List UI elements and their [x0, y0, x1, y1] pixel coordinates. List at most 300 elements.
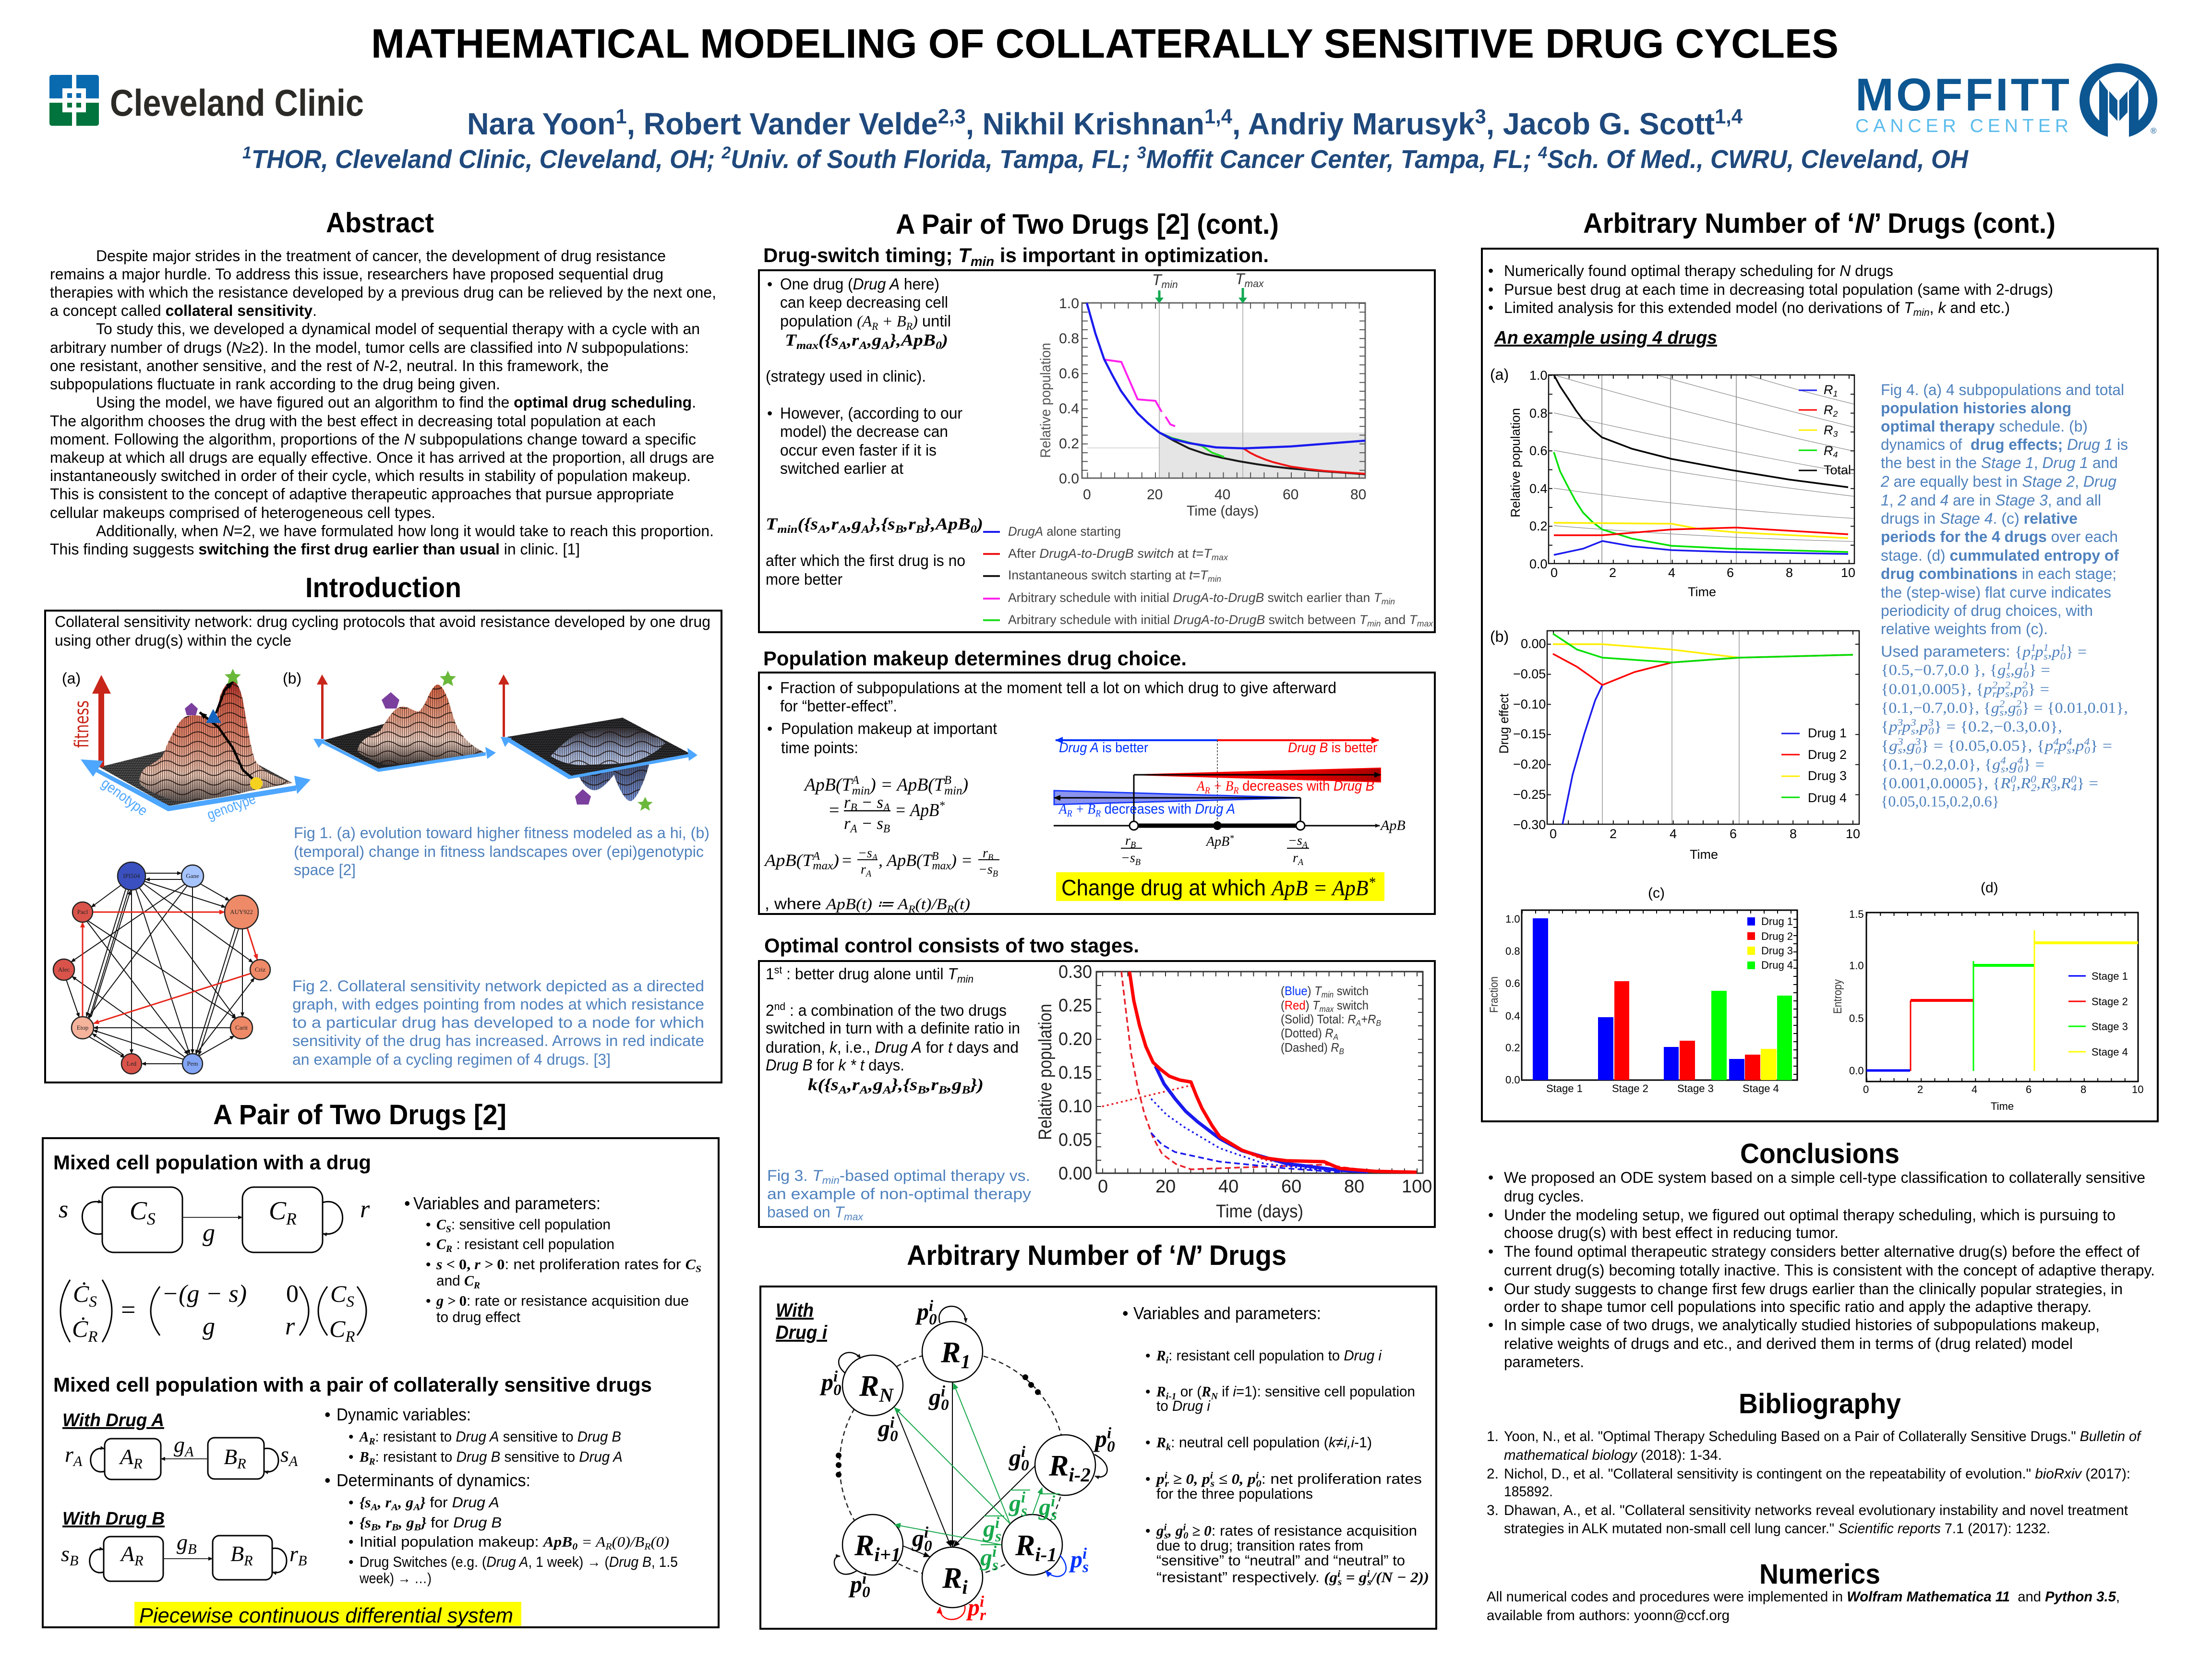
chart a: subpopulation histories: R4 — [1824, 444, 1838, 459]
equations: ApB at Tmin and Tmax: −sA — [858, 846, 878, 862]
list: variables and parameters — [404, 1193, 701, 1325]
chart b: drug effect: Drug 1 — [1808, 726, 1847, 740]
diagram: drug cycle state graph: pi0 — [1093, 1425, 1115, 1455]
legend: drug schedule curves: DrugA alone starting — [1008, 524, 1121, 539]
figure 2: collateral sensitivity network graph: Etop — [77, 1024, 88, 1031]
chart: optimal vs non-optimal therapy: (Dotted) RA — [1281, 1026, 1338, 1042]
chart c: fraction of drugs per stage: 1.0 — [1505, 913, 1520, 925]
figure 2: collateral sensitivity network graph: Alec — [58, 966, 70, 973]
diagram: with drug B: With Drug B — [62, 1509, 165, 1529]
diagram: drug choice number line: rB — [1125, 833, 1136, 850]
list: variables and parameters: CS: sensitive cell population — [436, 1216, 611, 1235]
text: used parameters: {0.001,0.0005}, { R01,R02,R03,R04} = — [1881, 773, 2098, 793]
text: collateral sensitivity network — [55, 613, 710, 649]
subheading: optimal control: Optimal control consists of two stages. — [764, 934, 1139, 957]
equation: matrix ODE: ĊS — [73, 1280, 97, 1310]
equation: matrix ODE: 0 — [286, 1280, 299, 1308]
chart: relative population over time with Tmin and Tmax: Relative population — [1038, 343, 1054, 458]
chart d: cumulated entropy: Stage 4 — [2092, 1046, 2128, 1058]
chart c: fraction of drugs per stage: (c) — [1648, 885, 1665, 901]
list: variables and parameters for N drugs: Ri-1 or (RN if i=1): sensitive cell population — [1156, 1383, 1415, 1402]
chart: optimal vs non-optimal therapy: 0.10 — [1058, 1096, 1092, 1117]
equations: ApB at Tmin and Tmax: = — [829, 800, 839, 820]
caption: figure 2 — [292, 977, 704, 1068]
chart b: drug effect: −0.15 — [1513, 727, 1546, 741]
diagram: drug choice number line: rA — [1293, 851, 1304, 867]
subheading: pair of collaterally sensitive drugs: Mixed cell population with a pair of collaterally sensitive drugs — [53, 1373, 652, 1396]
text: drug-switch timing explanation: occur even faster if it is — [780, 441, 937, 459]
list: variables and parameters: • — [426, 1237, 431, 1252]
chart d: cumulated entropy: 8 — [2080, 1083, 2086, 1095]
diagram: drug cycle state graph: gis — [983, 1515, 1001, 1545]
list: conclusions: • — [1488, 1243, 1493, 1260]
list: conclusions: Our study suggests to change first few drugs earlier than the clinically popular strategies, in — [1504, 1280, 2123, 1298]
text block: abstract: makeup at which all drugs are equally effective. Once it has arrived at the proportion, all drugs are — [50, 449, 714, 466]
text: two stages: switched in turn with a definite ratio in — [766, 1019, 1020, 1037]
chart d: cumulated entropy: (d) — [1981, 880, 1998, 896]
equations: ApB at Tmin and Tmax: = ApB* — [895, 799, 945, 820]
diagram: with drug A — [62, 1410, 298, 1479]
text: drug-switch timing explanation — [766, 275, 983, 588]
list: bibliography: 185892. — [1504, 1484, 1553, 1500]
chart d: cumulated entropy: Time — [1991, 1100, 2014, 1112]
list: bibliography: Yoon, N., et al. "Optimal Therapy Scheduling Based on a Pair of Collaterally Sensitive Drugs." Bulletin of — [1504, 1429, 2142, 1444]
list: numerical findings: Limited analysis for this extended model (no derivations of Tmin, k and etc.) — [1504, 299, 2010, 318]
list: conclusions: • — [1488, 1316, 1493, 1334]
text: drug-switch timing explanation: switched earlier at — [780, 459, 903, 477]
list: variables and parameters for N drugs: • — [1145, 1435, 1151, 1451]
chart a: subpopulation histories: 0.6 — [1529, 444, 1548, 458]
logo: Moffitt Cancer Center: CANCER CENTER — [1855, 116, 2068, 136]
equation: matrix ODE: CS — [330, 1280, 354, 1310]
list: numerical findings: • — [1488, 299, 1493, 316]
chart a: subpopulation histories: 0.4 — [1529, 481, 1548, 496]
equations: ApB at Tmin and Tmax: rB — [983, 846, 993, 862]
text: population makeup explanation: for “better-effect”. — [780, 697, 897, 715]
chart a: subpopulation histories: 10 — [1841, 565, 1855, 580]
text: used parameters — [1881, 642, 2128, 810]
caption: figure 4: stage. (d) cummulated entropy of — [1881, 547, 2119, 564]
chart c: fraction of drugs per stage: Stage 4 — [1743, 1082, 1779, 1094]
caption: figure 4: periodicity of drug choices, with — [1881, 602, 2093, 619]
equations: ApB at Tmin and Tmax: ApB(TAmax) — [764, 850, 839, 872]
label: with drug i — [776, 1300, 828, 1343]
list: variables and parameters for N drugs: • — [1145, 1523, 1151, 1539]
list: dynamic variables and determinants: • — [349, 1554, 354, 1570]
legend: drug schedule curves — [983, 524, 1433, 628]
chart: optimal vs non-optimal therapy: 80 — [1344, 1177, 1364, 1197]
text: drug-switch timing explanation: Tmin({sA,rA,gA},{s B,rB},ApB 0) — [766, 515, 983, 535]
chart d: cumulated entropy: 1.5 — [1849, 908, 1864, 920]
heading: Introduction: Introduction — [305, 572, 461, 603]
list: variables and parameters for N drugs — [1122, 1303, 1429, 1587]
callout: change drug at ApB = ApB*: Change drug at which ApB = ApB* — [1061, 874, 1376, 900]
logo: Moffitt Cancer Center: ® — [2151, 126, 2157, 135]
chart b: drug effect: 6 — [1730, 827, 1737, 841]
chart: optimal vs non-optimal therapy: 0.25 — [1058, 996, 1092, 1016]
chart a: subpopulation histories: 8 — [1786, 565, 1793, 580]
list: dynamic variables and determinants: • — [349, 1534, 354, 1550]
list: conclusions: choose drug(s) with best effect in reducing tumor. — [1504, 1224, 1839, 1241]
chart a: subpopulation histories: 2 — [1609, 565, 1616, 580]
caption: figure 1: space [2] — [294, 861, 356, 878]
list: conclusions: parameters. — [1504, 1353, 1584, 1370]
caption: figure 2: sensitivity of the drug has increased. Arrows in red indicate — [292, 1032, 704, 1049]
text block: abstract: a concept called collateral sensitivity. — [50, 302, 317, 319]
list: dynamic variables and determinants: • — [349, 1449, 354, 1465]
equation: matrix ODE: = — [121, 1295, 135, 1324]
chart: optimal vs non-optimal therapy: (Red) Tmax switch — [1281, 998, 1369, 1014]
diagram: with drug A: sA — [280, 1442, 298, 1469]
list: variables and parameters: CR : resistant cell population — [436, 1236, 614, 1254]
diagram: drug cycle state graph: gi0 — [912, 1524, 932, 1555]
list: bibliography — [1487, 1429, 2142, 1537]
chart: optimal vs non-optimal therapy: 0.05 — [1058, 1130, 1092, 1150]
text: drug-switch timing explanation: However, (according to our — [780, 404, 962, 422]
diagram: drug choice number line: AR + BR decreases with Drug A — [1058, 801, 1235, 819]
figure 2: collateral sensitivity network graph: AUY922 — [230, 908, 253, 915]
text: two stages: 2nd : a combination of the two drugs — [766, 1000, 1007, 1019]
chart c: fraction of drugs per stage: Stage 1 — [1546, 1082, 1583, 1094]
diagram: with drug A: BR — [224, 1444, 246, 1472]
panel: arbitrary number of drugs — [760, 1286, 1436, 1629]
diagram: drug cycle state graph: gis — [1038, 1493, 1057, 1524]
text block: abstract: arbitrary number of drugs (N≥2). In the model, tumor cells are classified into N subpopulations: — [50, 339, 689, 356]
diagram: drug cycle state graph: Ri-2 — [1048, 1450, 1091, 1486]
diagram: two-compartment model — [59, 1187, 370, 1252]
diagram: drug choice number line — [1054, 740, 1406, 867]
diagram: with drug B: BR — [230, 1541, 253, 1569]
caption: figure 3: Fig 3. Tmin-based optimal therapy vs. — [767, 1167, 1030, 1186]
equations: ApB at Tmin and Tmax: ApB(TAmin) = ApB(TBmin) — [803, 774, 968, 797]
chart a: subpopulation histories: 0.8 — [1529, 406, 1548, 421]
text block: abstract — [50, 247, 716, 558]
figure 2: collateral sensitivity network graph: Carit — [235, 1024, 248, 1031]
list: variables and parameters for N drugs: pir ≥ 0, p is ≤ 0, p i0: net proliferation rates — [1155, 1470, 1422, 1489]
chart b: drug effect: (b) — [1490, 628, 1509, 645]
text: collateral sensitivity network: using other drug(s) within the cycle — [55, 632, 291, 649]
equation: matrix ODE: CR — [329, 1315, 355, 1346]
equations: ApB at Tmin and Tmax: rB − sA — [844, 793, 890, 814]
diagram: with drug B: gB — [177, 1530, 197, 1557]
list: conclusions: • — [1488, 1280, 1493, 1298]
chart b: drug effect: −0.30 — [1513, 817, 1546, 832]
chart a: subpopulation histories: 0.0 — [1529, 557, 1548, 571]
chart a: subpopulation histories: 0.2 — [1529, 519, 1548, 533]
chart c: fraction of drugs per stage: 0.0 — [1505, 1074, 1520, 1086]
equations: ApB at Tmin and Tmax: = — [842, 851, 852, 870]
chart b: drug effect: −0.25 — [1513, 787, 1546, 802]
subheading: an example using 4 drugs: An example using 4 drugs — [1494, 328, 1717, 348]
list: variables and parameters for N drugs: for the three populations — [1156, 1485, 1313, 1502]
list: variables and parameters for N drugs: “resistant” respectively. (gis = gis/(N − 2)) — [1156, 1569, 1429, 1587]
chart d: cumulated entropy: 1.0 — [1849, 960, 1864, 972]
list: dynamic variables and determinants: Initial population makeup: ApB0 = AR(0)/BR(0) — [360, 1533, 669, 1552]
text block: numerics: All numerical codes and procedures were implemented in Wolfram Mathematica 11 and Python 3.5, — [1487, 1589, 2120, 1605]
list: variables and parameters: s < 0, r > 0: net proliferation rates for CS — [436, 1256, 701, 1274]
text: two stages: Drug B for k * t days. — [766, 1056, 904, 1074]
chart c: fraction of drugs per stage: Drug 1 — [1761, 915, 1793, 927]
chart a: subpopulation histories: R3 — [1824, 423, 1838, 439]
chart a: subpopulation histories: Total — [1824, 463, 1851, 477]
chart: optimal vs non-optimal therapy: 0.20 — [1058, 1029, 1092, 1049]
legend: drug schedule curves: Arbitrary schedule with initial DrugA-to-DrugB switch earlier than Tmin — [1008, 590, 1395, 606]
chart b: drug effect: 2 — [1610, 827, 1617, 841]
chart: optimal vs non-optimal therapy: 0.15 — [1058, 1063, 1092, 1083]
diagram: drug cycle state graph: pi0 — [848, 1570, 870, 1601]
list: conclusions: drug cycles. — [1504, 1188, 1584, 1205]
list: variables and parameters for N drugs: Rk: neutral cell population (k≠i,i-1) — [1156, 1434, 1372, 1453]
chart d: cumulated entropy: 0.5 — [1849, 1012, 1864, 1024]
list: variables and parameters: • — [426, 1293, 431, 1309]
list: numerical findings: Pursue best drug at each time in decreasing total population (same with 2-drugs) — [1504, 281, 2053, 298]
text: drug-switch timing explanation: Tmax({sA,rA,gA},ApB 0) — [785, 331, 948, 351]
list: conclusions: In simple case of two drugs, we analytically studied histories of subpopulations makeup, — [1504, 1316, 2100, 1334]
chart: optimal vs non-optimal therapy — [1035, 962, 1432, 1222]
chart: optimal vs non-optimal therapy: (Blue) Tmin switch — [1281, 984, 1369, 999]
diagram: two-compartment model: CS — [130, 1196, 156, 1228]
figure 2: collateral sensitivity network graph: Led — [127, 1060, 137, 1067]
text: drug-switch timing explanation: One drug (Drug A here) — [780, 275, 939, 293]
list: variables and parameters for N drugs: due to drug; transition rates from — [1156, 1537, 1363, 1554]
caption: figure 1: (temporal) change in fitness landscapes over (epi)genotypic — [294, 843, 704, 860]
text block: abstract: remains a major hurdle. To address this issue, researchers have proposed sequential drug — [50, 265, 663, 283]
caption: figure 4: Fig 4. (a) 4 subpopulations and total — [1881, 381, 2124, 398]
diagram: drug cycle state graph: R1 — [940, 1336, 971, 1372]
diagram: drug cycle state graph: pis — [1069, 1545, 1089, 1576]
equations: ApB at Tmin and Tmax: , ApB(TBmax) = — [878, 850, 973, 872]
diagram: drug cycle state graph: gi0 — [1009, 1443, 1029, 1474]
logo: Cleveland Clinic — [49, 75, 364, 126]
list: variables and parameters for N drugs: Ri: resistant cell population to Drug i — [1156, 1347, 1382, 1366]
chart: optimal vs non-optimal therapy: 0 — [1098, 1177, 1108, 1197]
chart a: subpopulation histories: 6 — [1727, 565, 1734, 580]
callout: piecewise continuous differential system: Piecewise continuous differential system — [139, 1604, 513, 1627]
diagram: drug cycle state graph: pi0 — [819, 1368, 842, 1399]
list: dynamic variables and determinants: BR: resistant to Drug B sensitive to Drug A — [359, 1448, 623, 1467]
text: drug-switch timing explanation: more better — [766, 570, 842, 588]
chart a: subpopulation histories: 1.0 — [1529, 368, 1548, 383]
figure 2: collateral sensitivity network graph: Criz — [255, 966, 265, 973]
list: dynamic variables and determinants: week) → …) — [359, 1570, 432, 1587]
legend: drug schedule curves: After DrugA-to-DrugB switch at t=Tmax — [1008, 546, 1228, 562]
diagram: two-compartment model: r — [360, 1196, 370, 1223]
caption: figure 2: an example of a cycling regimen of 4 drugs. [3] — [292, 1051, 611, 1068]
diagram: two-compartment model: g — [203, 1219, 215, 1247]
chart b: drug effect: Drug 2 — [1808, 747, 1847, 762]
panel: population makeup — [759, 673, 1435, 915]
chart: relative population over time with Tmin and Tmax: 0.8 — [1059, 331, 1079, 347]
chart d: cumulated entropy: Stage 3 — [2092, 1021, 2128, 1033]
list: bibliography: 3. — [1487, 1503, 1499, 1518]
chart b: drug effect: −0.20 — [1513, 757, 1546, 771]
chart b: drug effect: 4 — [1670, 827, 1677, 841]
logo: Cleveland Clinic: Cleveland Clinic — [110, 82, 364, 124]
diagram: with drug B: rB — [289, 1541, 307, 1569]
text block: abstract: subpopulations fluctuate in rank according to the drug being given. — [50, 375, 500, 393]
chart: relative population over time with Tmin and Tmax: 0.0 — [1059, 471, 1079, 487]
panel: optimal control — [759, 961, 1435, 1227]
list: conclusions: order to shape tumor cell populations into specific ratio and apply the adaptive therapy. — [1504, 1298, 2092, 1315]
diagram: two-compartment model: CR — [269, 1196, 297, 1228]
label: with drug i: With — [776, 1300, 814, 1321]
equation: matrix ODE: ĊR — [72, 1315, 98, 1346]
list: dynamic variables and determinants: Determinants of dynamics: — [337, 1470, 530, 1490]
diagram: drug cycle state graph: Ri+1 — [854, 1529, 901, 1565]
equation: matrix ODE — [60, 1280, 366, 1346]
text: drug-switch timing explanation: model) the decrease can — [780, 422, 948, 440]
chart d: cumulated entropy: Stage 1 — [2092, 970, 2128, 982]
chart b: drug effect: −0.05 — [1513, 667, 1546, 681]
legend: drug schedule curves: Instantaneous switch starting at t=Tmin — [1008, 568, 1221, 584]
text block: abstract: Additionally, when N=2, we have formulated how long it would take to reach this proportion. — [96, 522, 714, 540]
caption: figure 3: based on Tmax — [767, 1203, 864, 1223]
chart a: subpopulation histories — [1490, 366, 1855, 599]
equations: ApB at Tmin and Tmax: rA — [861, 862, 872, 878]
chart b: drug effect: 0 — [1550, 827, 1557, 841]
figure 1a: fitness landscape: fitness — [71, 700, 93, 748]
list: dynamic variables and determinants: • — [325, 1405, 331, 1424]
diagram: drug choice number line: Drug B is better — [1288, 740, 1377, 756]
chart: optimal vs non-optimal therapy: 20 — [1155, 1177, 1176, 1197]
diagram: with drug A: gA — [174, 1432, 194, 1460]
panel: N drugs example — [1482, 249, 2158, 1121]
text block: abstract: The algorithm chooses the drug with the best effect in decreasing total population at each — [50, 412, 656, 430]
chart a: subpopulation histories: R2 — [1824, 403, 1838, 419]
caption: figure 4 — [1880, 381, 2128, 637]
equation: matrix ODE: r — [285, 1313, 295, 1340]
equations: ApB at Tmin and Tmax: rA − sB — [844, 814, 890, 835]
chart d: cumulated entropy: 0.0 — [1849, 1065, 1864, 1077]
list: variables and parameters: g > 0: rate or resistance acquisition due — [436, 1292, 689, 1309]
heading: Numerics: Numerics — [1759, 1559, 1880, 1590]
list: bibliography: mathematical biology (2018): 1-34. — [1504, 1447, 1722, 1463]
caption: figure 4: optimal therapy schedule. (b) — [1881, 418, 2088, 435]
chart: optimal vs non-optimal therapy: (Solid) Total: RA+RB — [1281, 1012, 1381, 1028]
text block: abstract: moment. Following the algorithm, proportions of the N subpopulations change toward a specific — [50, 431, 696, 448]
figure 2: collateral sensitivity network graph: IPI504 — [123, 872, 140, 879]
list: variables and parameters for N drugs: • — [1145, 1384, 1151, 1400]
list: numerical findings — [1488, 262, 2053, 318]
diagram: drug choice number line: ApB — [1380, 817, 1406, 833]
list: variables and parameters for N drugs: gis, gi0 ≥ 0: rates of resistance acquisition — [1156, 1522, 1417, 1541]
chart d: cumulated entropy: 0 — [1863, 1083, 1869, 1095]
chart c: fraction of drugs per stage: 0.8 — [1505, 945, 1520, 957]
figure 1a: fitness landscape: (a) — [62, 670, 81, 687]
list: numerical findings: • — [1488, 281, 1493, 298]
diagram: with drug B — [61, 1509, 307, 1581]
diagram: drug cycle state graph — [819, 1298, 1115, 1624]
caption: figure 2: to a particular drug has developed to a node for which — [292, 1014, 704, 1031]
diagram: drug choice number line: −sA — [1288, 833, 1308, 850]
chart: optimal vs non-optimal therapy: 100 — [1402, 1177, 1432, 1197]
figure 2: collateral sensitivity network graph — [53, 862, 270, 1074]
text block: abstract: To study this, we developed a dynamical model of sequential therapy with a cycle with an — [96, 320, 700, 337]
list: variables and parameters: to drug effect — [436, 1309, 520, 1325]
text: two stages: 1st : better drug alone until Tmin — [766, 964, 974, 985]
affiliations: 1THOR, Cleveland Clinic, Cleveland, OH; 2Univ. of South Florida, Tampa, FL; 3Moffit Cancer Center, Tampa, FL; 4Sch. Of Med., CWRU, Cleveland, OH — [242, 143, 1969, 174]
chart b: drug effect: Drug 4 — [1808, 791, 1847, 805]
diagram: drug cycle state graph: Ri — [942, 1562, 968, 1598]
chart b: drug effect: 8 — [1790, 827, 1797, 841]
equations: ApB at Tmin and Tmax: , where ApB(t) ≔ AR(t)/BR(t) — [765, 895, 970, 915]
figure 1b: temporal change in fitness landscapes: (b) — [283, 670, 301, 687]
text: used parameters: {0.5,−0.7,0.0 }, { g1s,g10} = — [1881, 660, 2050, 680]
legend: drug schedule curves: Arbitrary schedule with initial DrugA-to-DrugB switch between Tmin and Tmax — [1008, 613, 1433, 628]
logo: Moffitt Cancer Center — [1855, 63, 2157, 137]
chart a: subpopulation histories: Time — [1688, 585, 1716, 599]
figure 1a: fitness landscape: genotype — [205, 791, 258, 823]
caption: figure 4: periods for the 4 drugs over each — [1881, 528, 2118, 545]
list: bibliography: Nichol, D., et al. "Collateral sensitivity is contingent on the repeatability of evolution." bioRxiv (2017): — [1504, 1466, 2130, 1482]
chart d: cumulated entropy — [1831, 880, 2143, 1112]
chart: optimal vs non-optimal therapy: 40 — [1218, 1177, 1238, 1197]
list: dynamic variables and determinants: Drug Switches (e.g. (Drug A, 1 week) → (Drug B, 1.5 — [360, 1553, 678, 1570]
text: population makeup explanation: Fraction of subpopulations at the moment tell a lot on which drug to give afterward — [780, 679, 1336, 697]
list: conclusions: current drug(s) becoming totally inactive. This is consistent with the concept of adaptive therapy. — [1504, 1262, 2155, 1279]
text block: abstract: Despite major strides in the treatment of cancer, the development of drug resistance — [96, 247, 666, 264]
diagram: with drug A: AR — [119, 1444, 143, 1472]
diagram: drug cycle state graph: gi0 — [878, 1414, 898, 1445]
list: dynamic variables and determinants: Dynamic variables: — [337, 1405, 471, 1424]
list: variables and parameters for N drugs: “sensitive” to “neutral” and “neutral” to — [1156, 1552, 1405, 1569]
text: used parameters: {g3s,g30} = {0.05,0.05}, { p4rp4s,p40} = — [1881, 736, 2112, 756]
text: two stages — [766, 964, 1020, 1096]
caption: figure 2: Fig 2. Collateral sensitivity network depicted as a directed — [292, 977, 704, 995]
chart: relative population over time with Tmin and Tmax: 1.0 — [1059, 296, 1079, 312]
text block: abstract: cellular makeups comprised of heterogeneous cell types. — [50, 504, 435, 521]
list: dynamic variables and determinants: {sB, rB, gB} for Drug B — [360, 1514, 502, 1533]
chart c: fraction of drugs per stage: Drug 3 — [1761, 945, 1793, 957]
chart a: subpopulation histories: Relative population — [1508, 408, 1523, 517]
chart: optimal vs non-optimal therapy: 0.00 — [1058, 1164, 1092, 1184]
list: dynamic variables and determinants: AR: resistant to Drug A sensitive to Drug B — [359, 1428, 621, 1447]
equations: ApB at Tmin and Tmax — [764, 774, 999, 915]
caption: figure 1 — [294, 824, 709, 878]
heading: A Pair of Two Drugs: A Pair of Two Drugs [2] — [213, 1099, 506, 1130]
list: variables and parameters: Variables and parameters: — [413, 1193, 601, 1213]
caption: figure 4: the best in the Stage 1, Drug 1 and — [1881, 454, 2118, 471]
list: bibliography: Dhawan, A., et al. "Collateral sensitivity networks reveal evolutionary instability and novel treatment — [1504, 1503, 2128, 1518]
text block: numerics — [1487, 1589, 2120, 1623]
caption: figure 4: drug combinations in each stage; — [1881, 565, 2116, 582]
text: drug-switch timing explanation: can keep decreasing cell — [780, 293, 948, 311]
caption: figure 3: an example of non-optimal therapy — [767, 1185, 1031, 1202]
list: variables and parameters: • — [426, 1217, 431, 1233]
diagram: drug choice number line: ApB* — [1205, 833, 1234, 849]
heading: Arbitrary Number of N Drugs: Arbitrary Number of ‘N’ Drugs — [907, 1240, 1286, 1271]
equation: matrix ODE: g — [203, 1313, 215, 1340]
caption: figure 1: Fig 1. (a) evolution toward higher fitness modeled as a hi, (b) — [294, 824, 709, 842]
equations: ApB at Tmin and Tmax: −sB — [978, 862, 998, 878]
list: variables and parameters: • — [404, 1193, 410, 1213]
diagram: with drug B: AR — [120, 1541, 144, 1569]
text: drug-switch timing explanation: • — [767, 405, 772, 422]
caption: figure 4: 1, 2 and 4 are in Stage 3, and all — [1881, 492, 2101, 509]
chart d: cumulated entropy: 2 — [1917, 1083, 1923, 1095]
text block: abstract: therapies with which the resistance developed by a previous drug can be relieved by the next one, — [50, 284, 716, 301]
text: drug-switch timing explanation: (strategy used in clinic). — [766, 367, 926, 385]
equation: matrix ODE: −(g − s) — [162, 1280, 247, 1308]
chart d: cumulated entropy: Stage 2 — [2092, 996, 2128, 1008]
figure 1a: fitness landscape — [62, 669, 311, 823]
chart d: cumulated entropy: 4 — [1972, 1083, 1977, 1095]
text block: abstract: This finding suggests switching the first drug earlier than usual in clinic. [1] — [50, 541, 580, 558]
list: variables and parameters: • — [426, 1257, 431, 1273]
text block: abstract: This is consistent to the concept of adaptive therapeutic approaches that pursue appropriate — [50, 485, 674, 503]
figure 1b: temporal change in fitness landscapes — [283, 670, 697, 811]
caption: figure 4: population histories along — [1881, 399, 2071, 417]
